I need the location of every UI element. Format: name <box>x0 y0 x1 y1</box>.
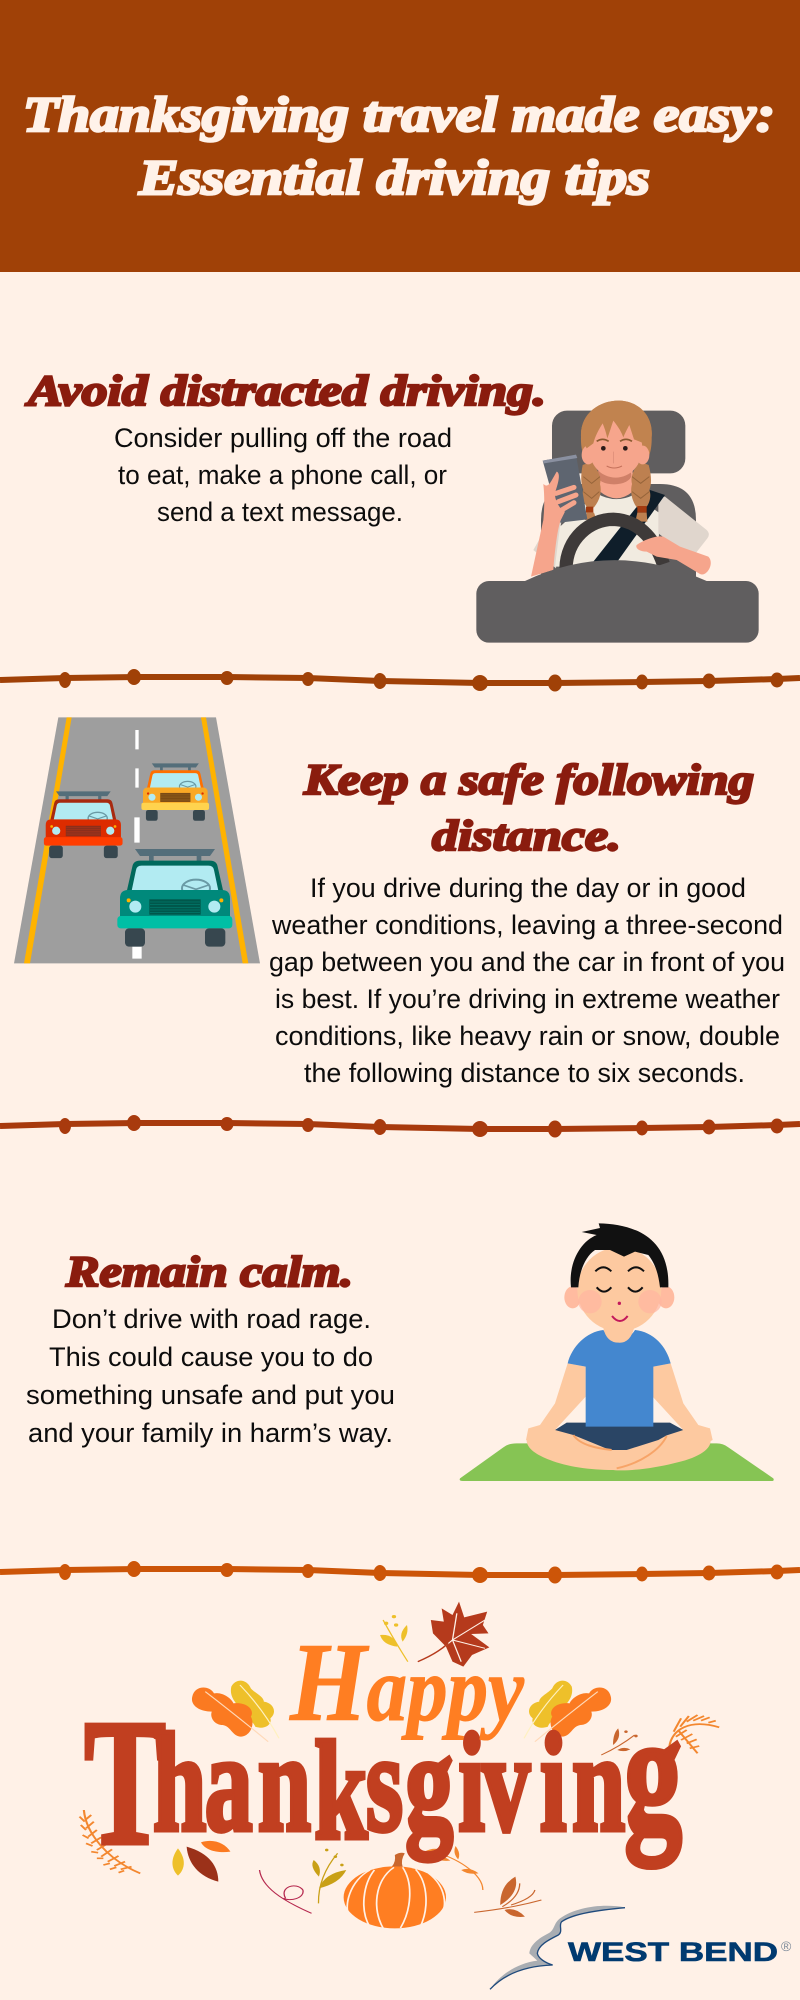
panel: keep a safe following distance <box>14 717 785 1088</box>
heading: keep a safe following distance: distance. <box>432 813 621 860</box>
icon: brown sprig <box>474 1877 541 1917</box>
icon: person meditating on a mat <box>460 1223 774 1481</box>
text block: keep a safe following distance: the following distance to six seconds. <box>304 1058 745 1088</box>
logo: West Bend <box>490 1906 792 1989</box>
text block: remain calm <box>26 1304 395 1448</box>
icon: crimson swirl <box>260 1870 312 1913</box>
heading: keep a safe following distance: Keep a safe following <box>303 757 754 804</box>
panel: happy thanksgiving lettering <box>80 1602 719 1928</box>
text block: avoid distracted driving <box>114 423 452 527</box>
text block: remain calm: This could cause you to do <box>49 1342 373 1372</box>
text block: remain calm: Don’t drive with road rage. <box>52 1304 371 1334</box>
text block: avoid distracted driving: Consider pulling off the road <box>114 423 452 453</box>
text block: keep a safe following distance: is best. If you’re driving in extreme weather <box>275 984 780 1014</box>
icon: fallen leaves <box>172 1841 230 1882</box>
heading: keep a safe following distance <box>303 757 754 860</box>
icon: left wheat <box>80 1810 140 1873</box>
text block: keep a safe following distance: conditions, like heavy rain or snow, double <box>275 1021 780 1051</box>
icon: maple leaf <box>418 1602 489 1667</box>
divider 2 <box>0 1115 800 1138</box>
heading: avoid distracted driving: Avoid distracted driving. <box>24 368 546 415</box>
registered mark: ® <box>781 1938 792 1954</box>
icon: woman driving while holding a phone <box>476 401 759 643</box>
text block: keep a safe following distance: weather conditions, leaving a three-second <box>271 910 783 940</box>
heading: Happy lettering: Happy <box>289 1621 525 1745</box>
divider 1 <box>0 669 800 692</box>
car: green <box>117 849 232 947</box>
logo wordmark: WEST BEND <box>568 1937 778 1967</box>
icon: orange sprig <box>424 1846 483 1890</box>
heading: Thanksgiving lettering: Thanksgiving <box>84 1679 682 1883</box>
panel: avoid distracted driving <box>24 368 759 643</box>
divider 3 <box>0 1561 800 1584</box>
text block: remain calm: and your family in harm’s way. <box>28 1418 393 1448</box>
text block: remain calm: something unsafe and put you <box>26 1380 395 1410</box>
icon: swoosh <box>490 1906 625 1989</box>
title <box>23 86 775 205</box>
icon: small sprig upper right <box>601 1728 638 1755</box>
header banner <box>0 0 800 272</box>
decorations: leaves and sprigs <box>80 1602 719 1928</box>
icon: right oak leaves <box>524 1681 611 1742</box>
heading: remain calm: Remain calm. <box>65 1249 353 1296</box>
text block: keep a safe following distance: gap between you and the car in front of you <box>269 947 785 977</box>
icon: left oak leaves <box>192 1681 279 1742</box>
car: yellow <box>141 763 209 821</box>
panel: remain calm <box>26 1223 774 1481</box>
icon: right wheat <box>669 1715 719 1753</box>
car: red <box>44 791 123 858</box>
icon: pumpkin <box>344 1853 446 1928</box>
icon: olive sprig <box>312 1849 346 1903</box>
text block: keep a safe following distance <box>269 873 785 1088</box>
icon: three cars on a road <box>14 717 260 963</box>
text block: avoid distracted driving: send a text message. <box>157 497 403 527</box>
title: Thanksgiving travel made easy: <box>23 86 775 142</box>
icon: yellow sprig <box>380 1615 408 1662</box>
text block: avoid distracted driving: to eat, make a phone call, or <box>118 460 447 490</box>
title: Essential driving tips <box>138 149 650 205</box>
text block: keep a safe following distance: If you drive during the day or in good <box>310 873 746 903</box>
